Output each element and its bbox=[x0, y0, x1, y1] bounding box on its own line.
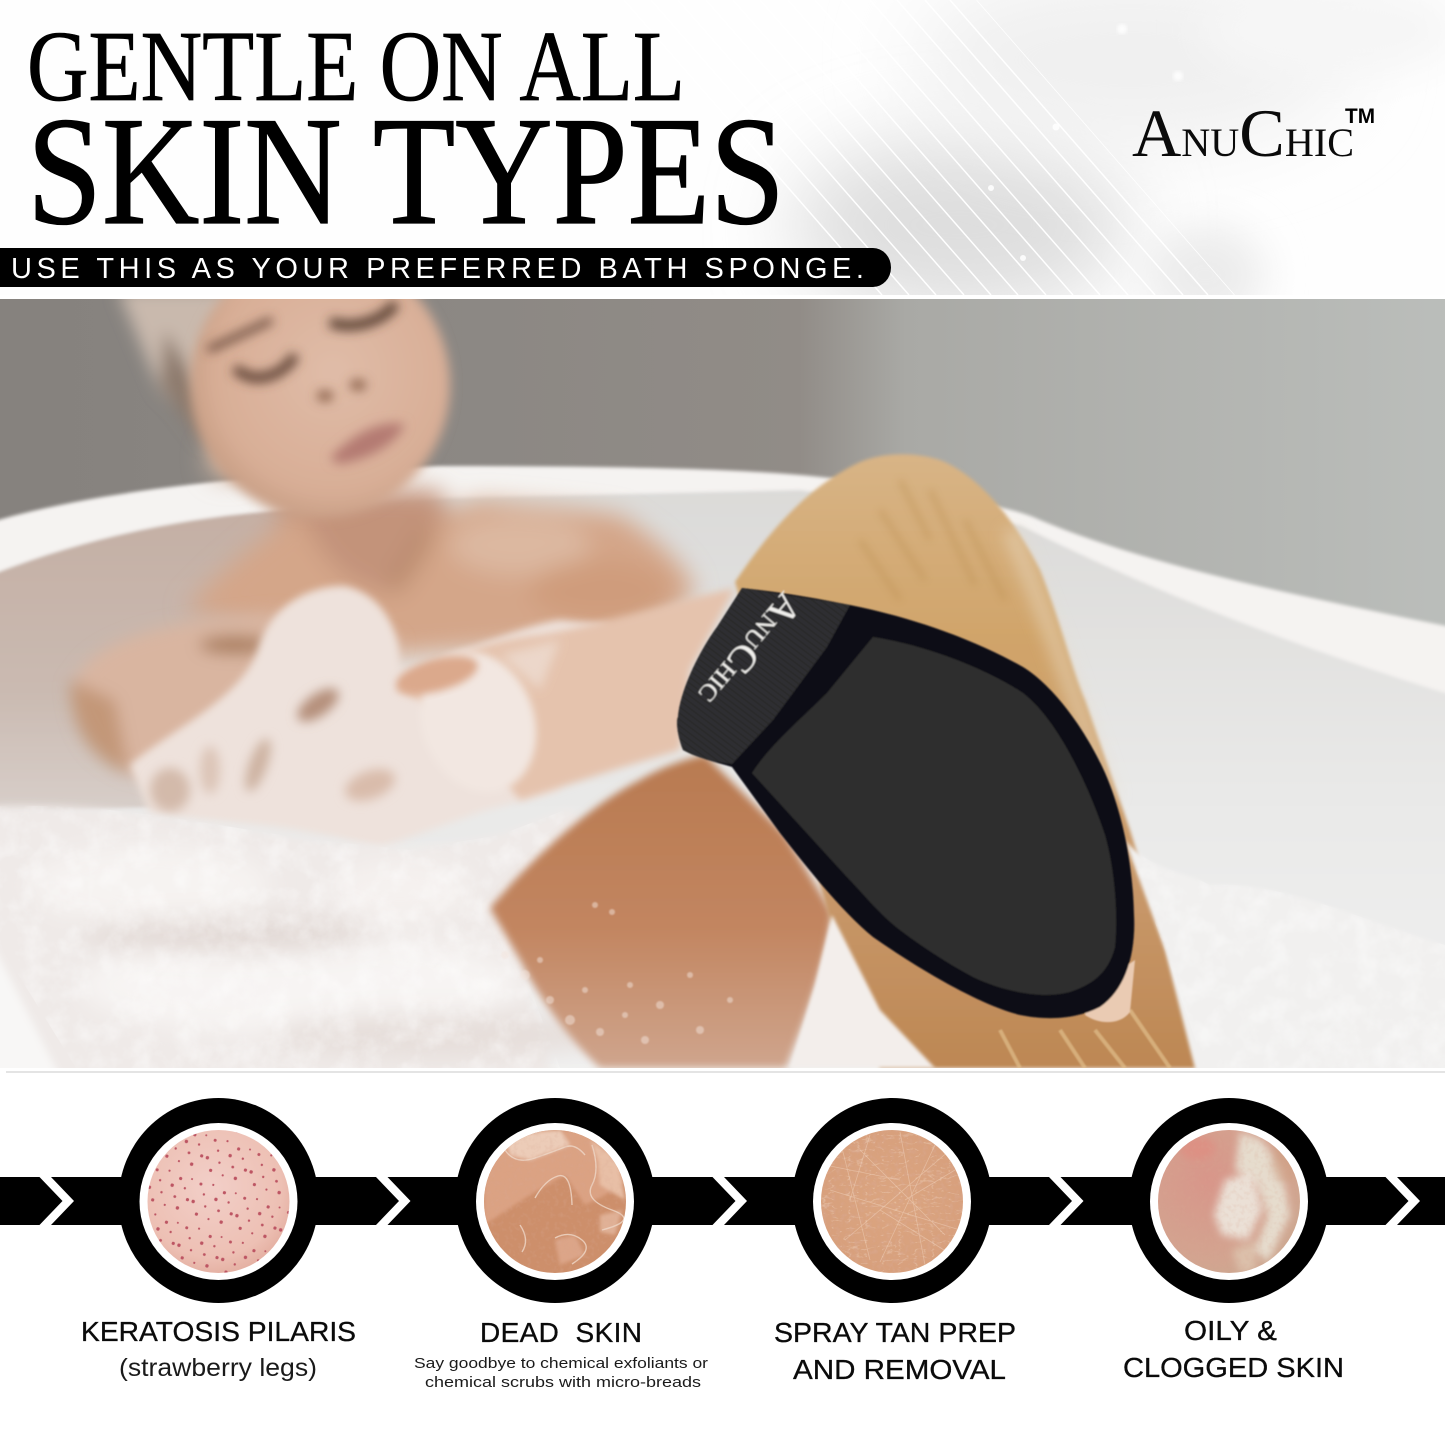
photo: woman in bathtub using exfoliating mitt bbox=[0, 299, 1445, 1068]
header background with diagonal lines bbox=[772, 0, 1420, 295]
label: oily and clogged skin: CLOGGED SKIN bbox=[1123, 1352, 1344, 1383]
face bbox=[184, 299, 456, 518]
label: spray tan prep and removal: SPRAY TAN PREP bbox=[774, 1317, 1016, 1348]
title line two: SKIN TYPES bbox=[27, 85, 785, 257]
mitt back edge bbox=[1085, 960, 1135, 1022]
foam on bent arm bbox=[130, 586, 610, 848]
circle: dead skin bbox=[455, 1098, 655, 1303]
woman bbox=[70, 252, 695, 800]
label: oily and clogged skin: OILY & bbox=[1184, 1315, 1277, 1346]
bubbles on thigh bbox=[501, 902, 733, 1044]
wall bbox=[0, 299, 1445, 628]
label: keratosis pilaris bbox=[81, 1316, 356, 1382]
circle: keratosis pilaris bbox=[118, 1098, 318, 1303]
circle: spray tan prep bbox=[792, 1098, 992, 1303]
mitt fabric bbox=[752, 637, 1116, 995]
label: oily and clogged skin bbox=[1123, 1315, 1344, 1383]
mitt binding bbox=[677, 588, 1134, 1018]
bathtub bbox=[0, 466, 1445, 1108]
label: dead skin: DEAD SKIN bbox=[480, 1317, 642, 1348]
label: spray tan prep and removal: AND REMOVAL bbox=[793, 1354, 1006, 1385]
label: keratosis pilaris: (strawberry legs) bbox=[119, 1354, 317, 1382]
forearm and hand bbox=[392, 588, 735, 809]
cuff brand text: ANUCHIC bbox=[690, 584, 809, 715]
label: dead skin bbox=[414, 1317, 708, 1391]
thigh bbox=[490, 755, 832, 1068]
mitt wrist cuff bbox=[677, 588, 850, 764]
soap foam in the water bbox=[0, 803, 577, 1068]
label: dead skin: Say goodbye to chemical exfoliants or bbox=[414, 1355, 708, 1372]
title line one: GENTLE ON ALL bbox=[27, 10, 685, 122]
circle: oily and clogged skin bbox=[1129, 1098, 1329, 1303]
left arm bbox=[63, 610, 274, 780]
photo bottom edge line bbox=[6, 1071, 1445, 1073]
brand logo: ANUCHIC bbox=[1132, 95, 1354, 171]
raised leg bbox=[735, 454, 1203, 1068]
label: dead skin: chemical scrubs with micro-breads bbox=[425, 1374, 701, 1391]
hair bbox=[114, 299, 228, 428]
brand logo: TM bbox=[1345, 105, 1375, 128]
label: spray tan prep and removal bbox=[774, 1317, 1016, 1385]
arrow band bbox=[0, 1177, 1445, 1225]
exfoliating mitt bbox=[677, 584, 1135, 1022]
foam beside the leg bbox=[790, 840, 1445, 1108]
neck and chest bbox=[185, 436, 695, 655]
facial features bbox=[208, 303, 405, 464]
process strip with arrows and skin circles bbox=[0, 1098, 1445, 1303]
label: keratosis pilaris: KERATOSIS PILARIS bbox=[81, 1316, 356, 1347]
subtitle bar: USE THIS AS YOUR PREFERRED BATH SPONGE. bbox=[11, 253, 864, 285]
header panel bbox=[0, 0, 1420, 295]
